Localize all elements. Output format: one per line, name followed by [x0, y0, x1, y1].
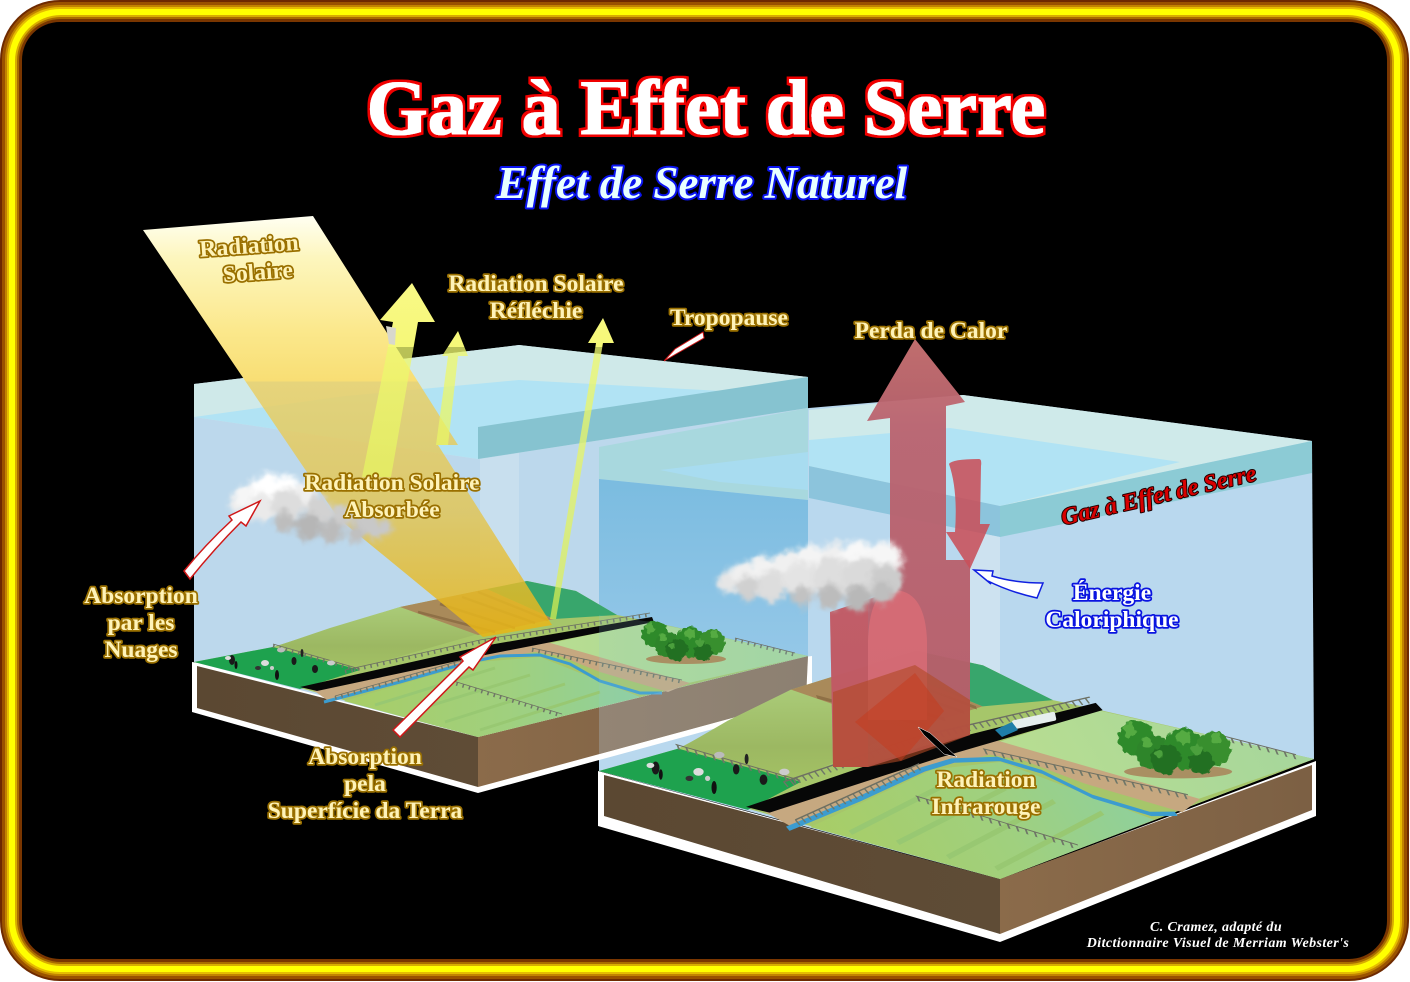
farmland, left	[194, 581, 808, 737]
label: solar radiation: Solaire	[222, 257, 294, 288]
label: reflected solar radiation: Radiation Solaire	[448, 271, 624, 297]
callout arrow: infrared radiation	[918, 727, 957, 757]
label: absorption by the surface: pela	[344, 771, 386, 797]
diagram: left block, solar radiation	[143, 216, 812, 793]
label: tropopause: Tropopause	[670, 305, 788, 331]
cows, right	[646, 752, 790, 794]
small white notch on the big arrow	[386, 326, 396, 345]
soil block and white outline, left	[192, 656, 812, 793]
central lighter column	[868, 590, 927, 720]
label: solar radiation	[199, 230, 301, 290]
title: Gaz à Effet de Serre	[367, 64, 1045, 151]
solar radiation beam	[143, 216, 552, 637]
cloud, right	[717, 541, 903, 611]
right block seen through the left block	[599, 408, 808, 707]
label: heat energy	[1045, 580, 1179, 633]
trees, right	[1119, 720, 1232, 778]
diagram: right block, greenhouse effect	[526, 339, 1387, 942]
reflected radiation, thin arrow	[550, 318, 614, 619]
reflected radiation, small arrow	[436, 331, 468, 445]
callout arrow: absorption by clouds	[184, 501, 260, 579]
label: heat loss: Perda de Calor	[855, 318, 1007, 344]
credits: C. Cramez, adapté du	[1150, 920, 1282, 935]
credits	[1086, 920, 1349, 951]
soil block and white outline, right	[598, 761, 1316, 942]
re-emitted heat: downward arrow from greenhouse gases	[946, 459, 990, 569]
heat absorbed, diamond	[855, 673, 944, 761]
label: absorbed solar radiation: Radiation Solaire	[304, 470, 480, 496]
label: infrared radiation	[931, 767, 1041, 820]
callout arrow: heat energy	[974, 570, 1043, 598]
reflected radiation, large arrow	[362, 283, 435, 477]
label: infrared radiation: Infrarouge	[931, 794, 1041, 820]
subtitle: Effet de Serre Naturel	[496, 158, 908, 208]
label: absorption by clouds	[84, 583, 198, 663]
farmland, right	[526, 649, 1387, 880]
label: solar radiation: Radiation	[199, 230, 299, 263]
heat absorbed by the ground	[833, 665, 970, 767]
left column tint	[830, 600, 868, 767]
label: heat energy: Énergie	[1073, 580, 1151, 606]
callout arrow: tropopause	[664, 332, 704, 361]
label: absorption by clouds: par les	[108, 610, 174, 636]
label: absorption by the surface: Superfície da Terra	[268, 798, 463, 824]
label: reflected solar radiation: Réfléchie	[490, 298, 582, 324]
trees, left	[642, 621, 726, 664]
truck on the road	[995, 712, 1057, 737]
label: absorption by clouds: Absorption	[84, 583, 198, 609]
label: absorbed solar radiation: Absorbée	[344, 497, 440, 523]
label: greenhouse gases: Gaz à Effet de Serre	[1059, 461, 1259, 531]
sky volume, left	[194, 345, 808, 737]
label: absorption by the surface	[268, 744, 463, 824]
cows, left	[225, 648, 335, 680]
label: absorption by clouds: Nuages	[104, 637, 178, 663]
label: infrared radiation: Radiation	[936, 767, 1036, 793]
cloud, left	[229, 473, 392, 543]
label: heat energy: Caloriphique	[1045, 607, 1179, 633]
label: absorption by the surface: Absorption	[308, 744, 422, 770]
sky volume, right block	[599, 395, 1314, 879]
credits: Ditctionnaire Visuel de Merriam Webster's	[1086, 936, 1349, 951]
translucent overlay on soil and land	[599, 615, 808, 754]
label: reflected solar radiation	[448, 271, 624, 324]
label: absorbed solar radiation	[304, 470, 480, 523]
infrared radiation: red arrow going up	[830, 339, 970, 767]
callout arrow: absorption by surface	[393, 637, 496, 737]
